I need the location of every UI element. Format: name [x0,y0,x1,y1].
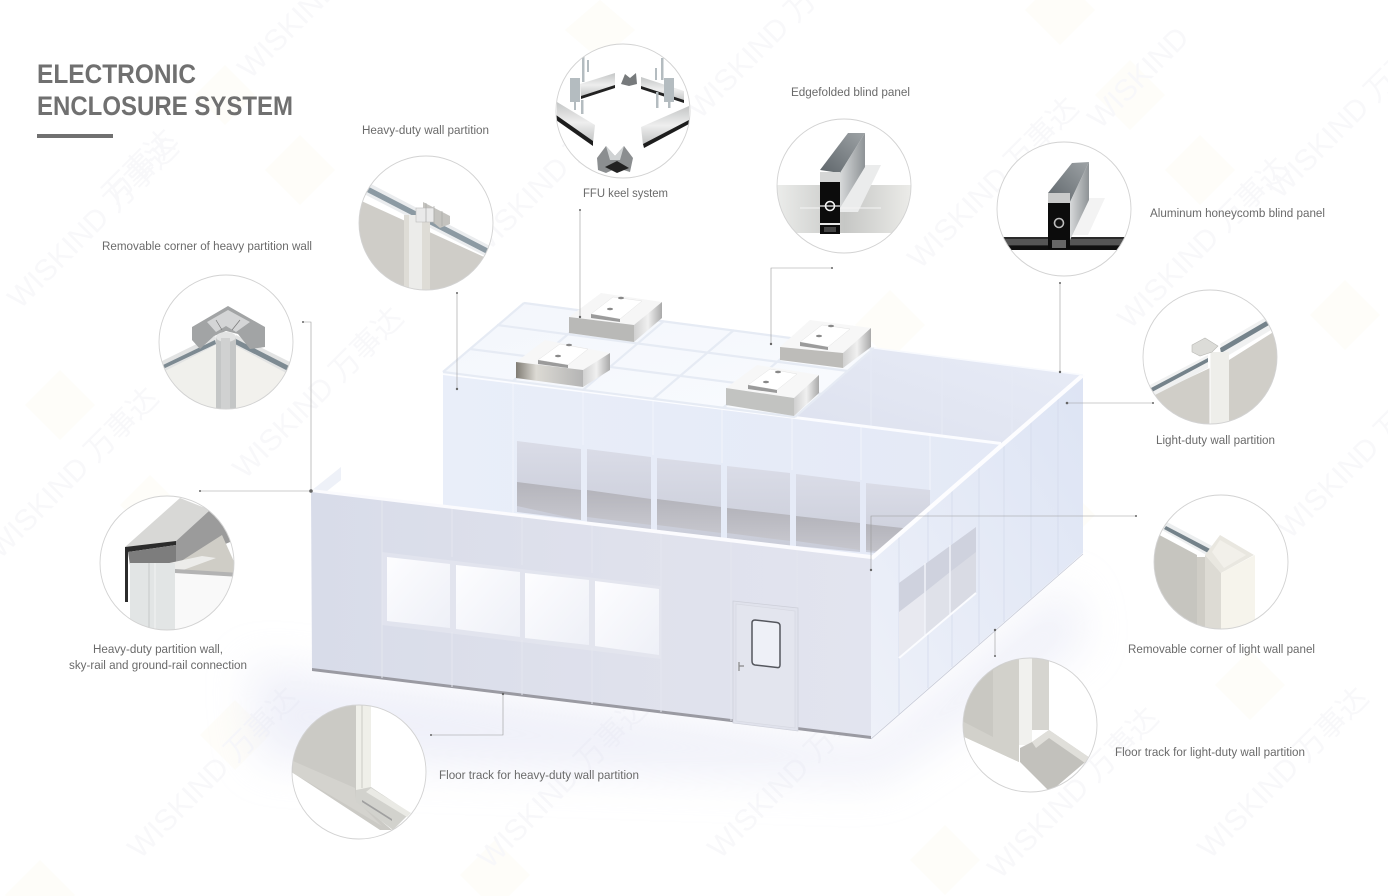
inner back walls [795,348,1083,445]
label: light-duty wall partition: Light-duty wall partition [1156,433,1275,447]
side stub wall [311,467,341,495]
FFU unit 2 [516,340,610,387]
front wall top rail [311,489,871,559]
label: FFU keel system: FFU keel system [583,186,668,200]
FFU unit 3 [780,320,871,368]
label: heavy-duty partition wall connection [69,642,247,672]
detail: edgefolded blind panel [777,119,912,253]
label: floor track for light-duty wall partition: Floor track for light-duty wall partition [1115,745,1305,759]
label: removable corner of heavy partition wall: Removable corner of heavy partition wall [102,239,312,253]
watermark background: WISKIND 万事达 [472,691,655,875]
front wall [311,489,871,739]
watermark background: WISKIND [1082,21,1196,135]
ceiling grid [443,302,874,417]
enclosure building [311,293,1085,739]
title: ELECTRONIC [37,59,196,89]
front wall windows [382,552,661,659]
watermark background: WISKIND 万事达 [982,701,1165,885]
watermark background: WISKIND 万事达 [227,301,410,485]
label: heavy-duty partition wall connection: sky-rail and ground-rail connection [69,658,247,672]
watermark background: WISKIND 万事达 [702,681,885,865]
detail: heavy-duty partition wall connection [100,496,240,640]
detail: removable corner of heavy partition wall [159,275,293,415]
detail: light-duty wall partition [1143,290,1285,430]
detail: floor track for heavy-duty wall partition [285,700,426,839]
watermark background: WISKIND 万事达 [1112,151,1295,335]
keel rails [557,102,595,143]
label: heavy-duty partition wall connection: Heavy-duty partition wall, [93,642,223,656]
label: aluminum honeycomb blind panel: Aluminum honeycomb blind panel [1150,206,1325,220]
detail: floor track for light-duty wall partition [960,655,1097,792]
right wall window [899,527,976,658]
floor shadow [250,585,1085,780]
watermark background: WISKIND 万事达 [2,131,185,315]
watermark background: WISKIND 万事达 [902,91,1085,275]
partition roof rim [443,372,1001,445]
label: heavy-duty wall partition: Heavy-duty wall partition [362,123,489,137]
title [37,59,293,138]
detail: FFU keel system [556,44,690,178]
detail: aluminum honeycomb blind panel [997,142,1131,276]
door handle [739,662,744,671]
title rule [37,134,113,138]
label: edgefolded blind panel: Edgefolded blind panel [791,85,910,99]
detail: removable corner of light wall panel [1150,495,1288,640]
watermark background: WISKIND 万事达 [462,81,645,265]
watermark background: 万事达 [97,123,184,210]
detail: heavy-duty wall partition [355,156,495,300]
title: ENCLOSURE SYSTEM [37,91,293,121]
door vision panel [752,620,780,668]
rear partition wall [443,372,1001,570]
right wall [870,348,1085,739]
leader lines [199,209,1154,736]
rear wall windows [517,441,930,558]
watermark background: WISKIND 万事达 [122,681,305,865]
door [733,601,798,731]
right wall top rail [870,374,1085,560]
label: floor track for heavy-duty wall partition: Floor track for heavy-duty wall partition [439,768,639,782]
label: removable corner of light wall panel: Removable corner of light wall panel [1128,642,1315,656]
FFU unit 4 [726,365,819,416]
FFU unit 1 [569,293,662,342]
hanger brackets [570,55,674,114]
watermark background: WISKIND 万事达 [1192,681,1375,865]
